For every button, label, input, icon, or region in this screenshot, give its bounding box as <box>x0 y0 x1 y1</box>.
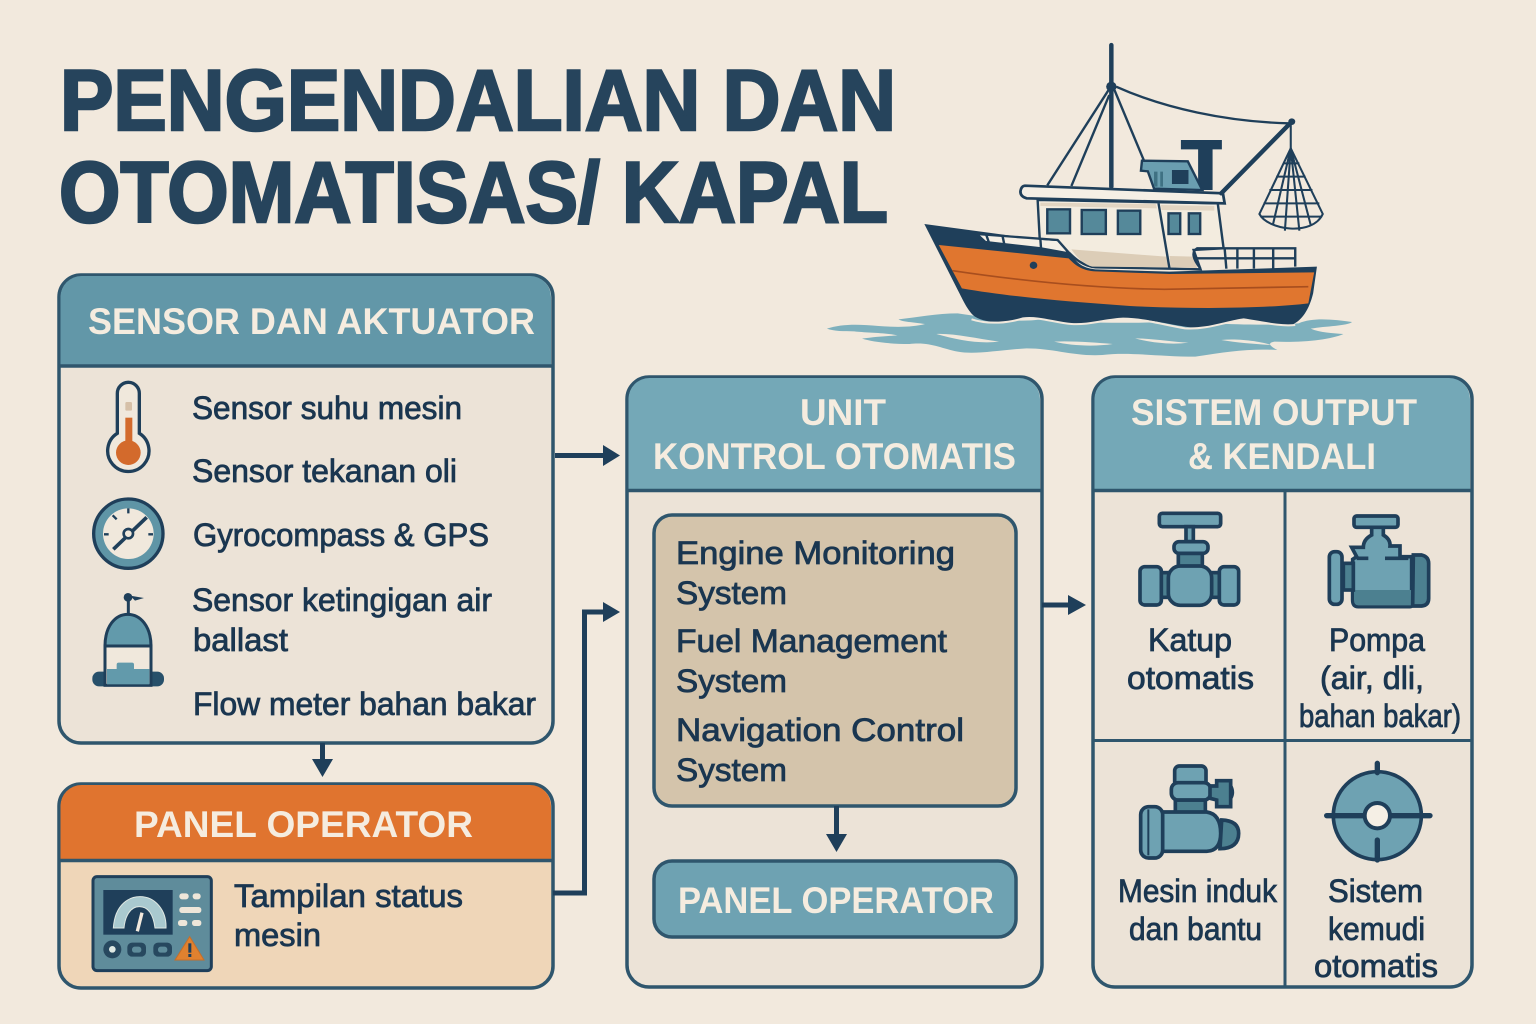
cell: katup otomatis <box>1127 513 1254 696</box>
arrow: operator panel to control unit <box>553 602 620 896</box>
cell: pompa: (air, dli, <box>1320 660 1424 696</box>
icon: autopilot target <box>1327 763 1430 860</box>
roof <box>1020 186 1225 203</box>
header: sistem output dan kendali: & KENDALI <box>1188 436 1376 477</box>
icon: control panel display <box>93 877 211 971</box>
icon: valve <box>1140 513 1239 605</box>
cell: mesin induk dan bantu: dan bantu <box>1129 911 1262 947</box>
cell: katup otomatis: Katup <box>1148 622 1232 658</box>
icon: engine <box>1141 766 1239 858</box>
sensor list: ballast <box>193 622 288 658</box>
arrow: control unit to output <box>1042 595 1086 615</box>
arrow: sensor to operator panel <box>312 743 333 777</box>
text: tampilan status mesin: Tampilan status <box>234 878 463 914</box>
hull <box>924 224 1317 327</box>
systems list box: Fuel Management <box>676 623 947 659</box>
title: OTOMATISAS/ KAPAL <box>59 145 888 241</box>
title <box>59 53 896 241</box>
water waves <box>827 313 1352 357</box>
panel: sistem output dan kendali <box>1093 377 1472 987</box>
systems list box: System <box>676 663 787 699</box>
systems list box: System <box>676 575 787 611</box>
systems list box: Engine Monitoring <box>676 535 955 571</box>
icon: ballast level sensor <box>92 593 164 686</box>
button: panel operator: PANEL OPERATOR <box>678 880 994 921</box>
text: tampilan status mesin: mesin <box>234 917 321 953</box>
text: tampilan status mesin <box>234 878 463 953</box>
icon: gyrocompass gauge <box>94 499 163 568</box>
wheelhouse <box>1141 161 1202 190</box>
header: unit kontrol otomatis: KONTROL OTOMATIS <box>653 436 1016 477</box>
panel: unit kontrol otomatis <box>627 377 1042 987</box>
sensor list: Sensor tekanan oli <box>192 453 457 489</box>
systems list box: System <box>676 752 787 788</box>
mast and rigging <box>1105 45 1118 187</box>
arrow: sensor to control unit <box>555 445 620 466</box>
funnel <box>1181 140 1222 190</box>
cell: sistem kemudi otomatis: kemudi <box>1328 911 1425 947</box>
illustration: fishing boat on waves <box>827 45 1352 357</box>
arrow: systems to panel operator <box>826 806 847 852</box>
header: unit kontrol otomatis <box>627 378 1042 490</box>
icon: thermometer <box>108 382 149 471</box>
header: panel operator <box>59 785 553 860</box>
sensor list: Flow meter bahan bakar <box>193 686 536 722</box>
sensor list: Sensor ketingigan air <box>192 582 492 618</box>
water edge highlight <box>972 318 1295 329</box>
header: unit kontrol otomatis: UNIT <box>800 392 886 433</box>
cell: mesin induk dan bantu: Mesin induk <box>1118 873 1278 909</box>
header: sensor dan aktuator: SENSOR DAN AKTUATOR <box>88 301 535 342</box>
panel: sensor dan aktuator <box>59 275 553 743</box>
hanging net <box>1259 123 1323 231</box>
cell: sistem kemudi otomatis <box>1314 763 1438 984</box>
cabin windows <box>1047 209 1200 234</box>
stern railing <box>1193 248 1295 269</box>
cell: sistem kemudi otomatis: otomatis <box>1314 948 1438 984</box>
header: sensor dan aktuator <box>59 276 553 366</box>
cell: pompa: Pompa <box>1329 622 1425 658</box>
bow railing <box>977 234 1068 253</box>
sensor list: Gyrocompass & GPS <box>193 517 489 553</box>
cell: mesin induk dan bantu <box>1118 766 1278 947</box>
button: panel operator <box>654 861 1016 937</box>
header: sistem output dan kendali <box>1093 378 1472 490</box>
cabin <box>1038 200 1224 269</box>
systems list box <box>654 515 1016 806</box>
cell: pompa: bahan bakar) <box>1299 698 1461 734</box>
cell: pompa <box>1299 516 1461 734</box>
cell: katup otomatis: otomatis <box>1127 660 1254 696</box>
icon: pump <box>1329 516 1429 607</box>
sensor list <box>192 390 536 722</box>
header: sistem output dan kendali: SISTEM OUTPUT <box>1131 392 1417 433</box>
sensor list: Sensor suhu mesin <box>192 390 462 426</box>
panel: panel operator left <box>59 784 553 988</box>
cell: sistem kemudi otomatis: Sistem <box>1328 873 1423 909</box>
systems list box: Navigation Control <box>676 712 964 748</box>
header: panel operator: PANEL OPERATOR <box>134 804 473 845</box>
title: PENGENDALIAN DAN <box>60 53 896 149</box>
